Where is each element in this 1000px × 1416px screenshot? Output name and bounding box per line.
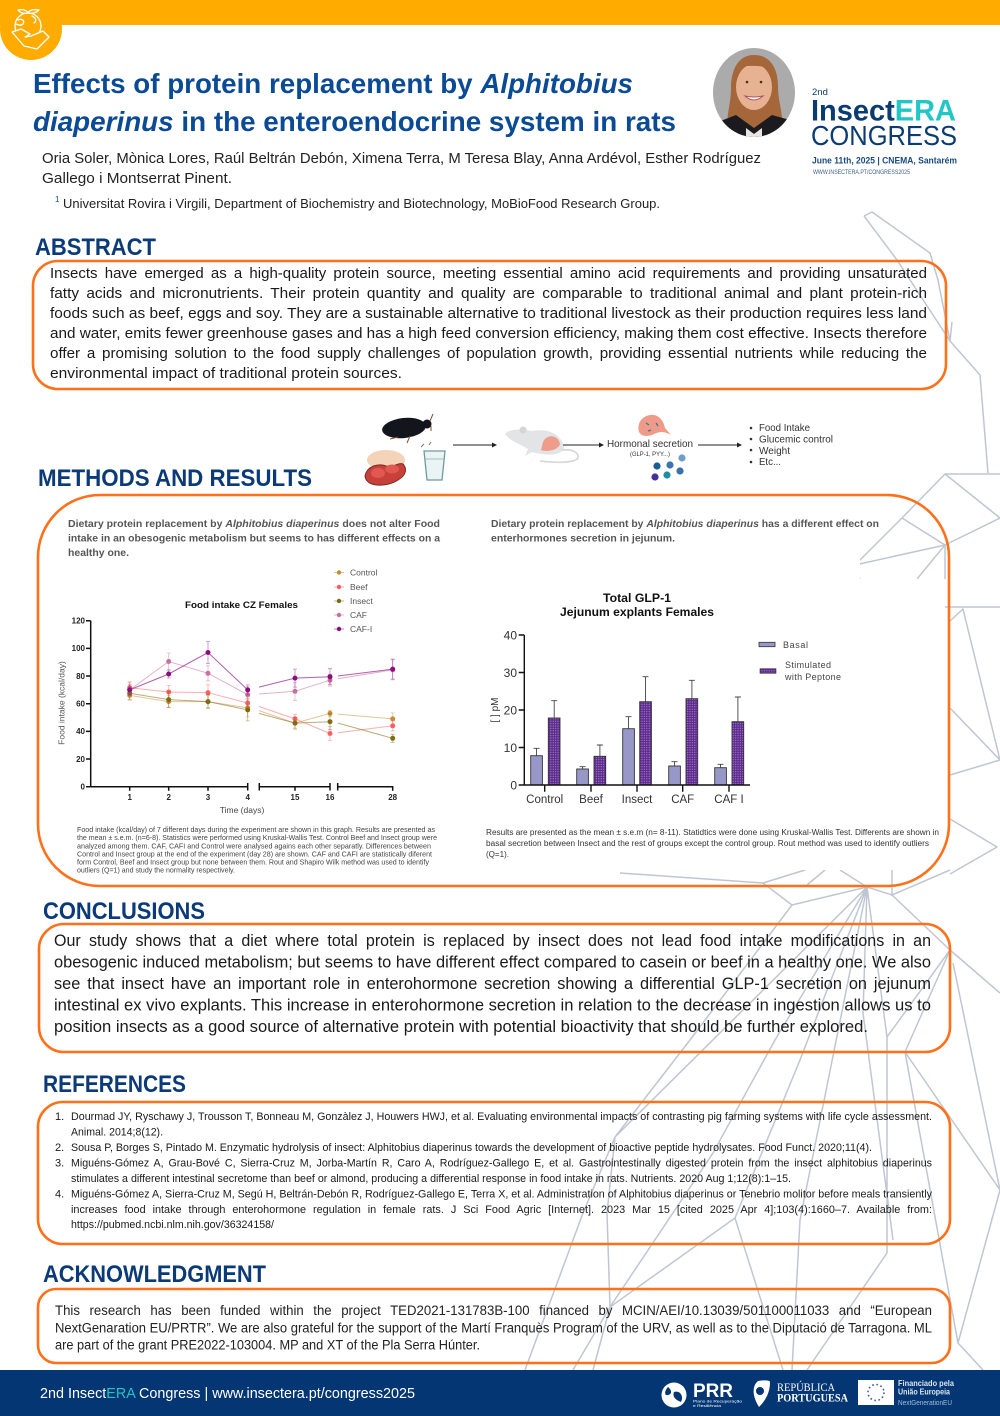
heading: conclusions: CONCLUSIONS xyxy=(43,898,205,925)
outcomes list: Glucemic control xyxy=(759,434,833,446)
reference list: https://pubmed.ncbi.nlm.nih.gov/36324158/ xyxy=(71,1219,275,1231)
icon: beetle xyxy=(381,414,433,443)
chart legend: Insect xyxy=(350,596,373,606)
reference list: Dourmad JY, Ryschawy J, Trousson T, Bonneau M, Gonzàlez J, Houwers HWJ, et al. Evaluating environmental impacts of contrasting pig farming systems with life cycle assessment. xyxy=(71,1111,932,1123)
panel: references xyxy=(38,1102,950,1244)
logo: EU funding: União Europeia xyxy=(898,1388,950,1396)
chart axes: 0 xyxy=(81,782,86,792)
reference list: increases food intake through enterohormone regulation in female rats. J Sci Food Agric [Internet]. 2023 Mar 15 [cited 2025 Apr 4];103(4):1660–7. Available from: xyxy=(71,1204,932,1216)
diagram: experimental workflow xyxy=(365,414,833,485)
right chart caption: (Q=1). xyxy=(486,850,509,859)
title xyxy=(33,68,676,137)
chart axes: 0 xyxy=(510,778,517,792)
heading: methods and results: METHODS AND RESULTS xyxy=(38,465,312,492)
chart axes: 15 xyxy=(291,793,300,802)
chart title: Jejunum explants Females xyxy=(560,605,714,619)
reference list: Animal. 2014;8(12). xyxy=(71,1126,163,1138)
logo: PRR: Plano de Recuperação xyxy=(693,1400,742,1404)
right subheading: enterhormones secretion in jejunum. xyxy=(491,532,675,544)
abstract text: and water, emits fewer greenhouse gases and has a high feed conversion efficiency, making them cost effective. Insects therefore xyxy=(50,325,927,342)
chart axes: 60 xyxy=(76,700,86,708)
chart legend: Control xyxy=(350,568,378,578)
chart axes: 30 xyxy=(504,666,517,680)
conclusions text: Our study shows that a diet where total protein is replaced by insect does not lead food intake modifications in an xyxy=(54,931,931,950)
left chart caption: outliers (Q=1) and study the normality respectively. xyxy=(77,866,235,874)
left chart caption: Food intake (kcal/day) of 7 different days during the experiment are shown in this graph. Results are presented as xyxy=(77,825,435,834)
logo: República Portuguesa: REPÚBLICA xyxy=(777,1380,835,1394)
chart axes xyxy=(490,628,750,806)
abstract text: offer a promising solution to the food supply challenges of population growth, providing essential nutrients while reducing the xyxy=(50,345,927,362)
outcomes list: Etc... xyxy=(759,456,781,468)
heading: acknowledgment: ACKNOWLEDGMENT xyxy=(43,1261,266,1288)
abstract text xyxy=(50,265,927,382)
left chart caption: analyzed among them. CAF, CAFI and Control were analysed agains each other separatly. Differences between xyxy=(77,842,431,850)
conclusions text: obesogenic induced metabolism; but seems to have different effect compared to casein or beef in a healthy one. We also xyxy=(54,952,931,972)
left subheading xyxy=(68,518,440,559)
chart axes: Time (days) xyxy=(220,805,264,815)
authors: Oria Soler, Mònica Lores, Raúl Beltrán Debón, Ximena Terra, M Teresa Blay, Anna Ardévol, Esther Rodríguez xyxy=(42,150,761,167)
left chart caption: Control and Insect group at the end of the experiment (day 28) are shown. CAF and CAFI are statistically diferent xyxy=(77,850,433,858)
abstract text: fatty acids and micronutrients. Their protein quantity and quality are comparable to traditional animal and plant protein-rich xyxy=(50,285,927,302)
reference list: Miguéns-Gómez A, Sierra-Cruz M, Segú H, Beltrán-Debón R, Rodríguez-Gallego E, Terra X, et al. Administration of Alphitobius diaperinus or Tenebrio molitor before meals transiently xyxy=(71,1188,932,1200)
acknowledgment text: This research has been funded within the project TED2021-131783B-100 financed by MCIN/AEI/10.13039/501100011033 and “European xyxy=(55,1303,932,1318)
chart title: Total GLP-1 xyxy=(603,591,671,605)
chart axes: 40 xyxy=(76,727,86,736)
arrow: to outcomes xyxy=(698,442,742,448)
right subheading: Dietary protein replacement by Alphitobius diaperinus has a different effect on xyxy=(491,518,879,530)
chart axes: 20 xyxy=(504,704,517,718)
chart title: Food intake CZ Females xyxy=(185,600,298,610)
authors: Gallego i Montserrat Pinent. xyxy=(42,170,232,187)
conclusions text: position insects as a good source of alternative protein with potential bioactivity that should be further explored. xyxy=(54,1017,868,1036)
chart axes: Beef xyxy=(579,794,604,806)
acknowledgment text: are part of the grant PRE2022-103004. MP and XT of the Pla Serra Húnter. xyxy=(55,1338,480,1352)
left chart caption: form Control, Beef and Insect group but none between them. Rout and Shapiro Wilk method was used to identify xyxy=(77,858,429,866)
chart axes: Insect xyxy=(622,794,653,806)
reference list: Miguéns-Gómez A, Grau-Bové C, Sierra-Cruz M, Jorba-Martín R, Caro A, Rodríguez-Gallego E, et al. Gastrointestinally digested protein from the insect alphitobius diaperinus xyxy=(71,1158,932,1170)
reference list: 1. xyxy=(55,1111,64,1123)
hormone dots xyxy=(651,454,686,481)
icon: water glass xyxy=(421,442,445,480)
chart axes: 4 xyxy=(245,793,250,802)
heading: references: REFERENCES xyxy=(43,1071,186,1098)
logo: PRR: PRR xyxy=(693,1381,733,1402)
logo: EU funding: NextGenerationEU xyxy=(898,1400,952,1407)
chart axes: 3 xyxy=(206,793,211,802)
chart axes: 20 xyxy=(76,755,86,764)
right subheading xyxy=(491,518,879,544)
chart axes: Control xyxy=(526,794,563,806)
chart axes: 100 xyxy=(72,644,86,653)
affiliation: 1 xyxy=(55,195,60,204)
chart legend: with Peptone xyxy=(784,672,841,682)
logo: EU funding xyxy=(858,1379,954,1407)
arrow: to rat xyxy=(453,442,497,448)
panel: conclusions xyxy=(39,924,950,1052)
arrow: to hormonal secretion xyxy=(563,442,604,448)
chart axes: 16 xyxy=(326,793,335,802)
outcomes list xyxy=(750,422,833,468)
bars: stimulated with peptone xyxy=(548,699,744,785)
chart axes: 10 xyxy=(504,741,517,755)
conclusions text: see that insect have an important role in enterohormone secretion showing a differential GLP-1 secretion on jejunum xyxy=(54,974,931,993)
chart axes xyxy=(56,616,398,815)
icon: globe in hand with sprout xyxy=(12,10,49,49)
conclusions text xyxy=(54,931,931,1036)
title: Effects of protein replacement by Alphitobius xyxy=(33,68,633,99)
chart axes: 40 xyxy=(504,628,517,642)
icon: rat xyxy=(505,426,578,462)
author photo xyxy=(712,48,796,140)
logo: República Portuguesa xyxy=(754,1380,848,1407)
reference list: Sousa P, Borges S, Pintado M. Enzymatic hydrolysis of insect: Alphitobius diaperinus towards the development of bioactive peptide hydrolysates. Food Funct. 2020;11(4). xyxy=(71,1142,872,1154)
hormonal secretion label: Hormonal secretion xyxy=(607,439,693,450)
hormonal secretion label: (GLP-1, PYY...) xyxy=(630,452,670,458)
chart legend: CAF xyxy=(350,610,367,620)
abstract text: Insects have emerged as a high-quality protein source, meeting essential amino acid requirements and providing unsaturated xyxy=(50,265,927,282)
congress logo: CONGRESS xyxy=(811,120,957,151)
congress logo: WWW.INSECTERA.PT/CONGRESS2025 xyxy=(813,170,911,176)
left subheading: healthy one. xyxy=(68,547,129,559)
reference list: 3. xyxy=(55,1158,64,1170)
outcomes list: Food Intake xyxy=(759,422,810,434)
series: insect xyxy=(127,687,395,742)
series: control xyxy=(127,690,395,728)
conclusions text: intestinal ex vivo explants. This increase in enterohormone secretion in relation to the decrease in ingestion allows us to xyxy=(54,996,931,1014)
title: diaperinus in the enteroendocrine system in rats xyxy=(33,106,676,137)
series: CAF xyxy=(127,653,395,703)
hormonal secretion label xyxy=(607,439,693,458)
left subheading: intake in an obesogenic metabolism but seems to has different effects on a xyxy=(68,532,440,544)
abstract text: foods such as beef, eggs and soy. They are a sustainable alternative to traditional livestock as their production requires less land xyxy=(50,305,927,322)
outcomes list: Weight xyxy=(759,445,790,457)
logo: PRR: e Resiliência xyxy=(693,1404,721,1408)
congress logo: InsectERA xyxy=(811,94,956,128)
left subheading: Dietary protein replacement by Alphitobius diaperinus does not alter Food xyxy=(68,518,440,530)
logo: República Portuguesa: PORTUGUESA xyxy=(777,1390,848,1404)
panel: abstract xyxy=(33,261,946,389)
chart title xyxy=(560,591,714,619)
reference list: stimulates a different intestinal secretome than beef or almond, producing a differential response in food intake in rats. Nutrients. 2020 Aug 1;12(8):1–15. xyxy=(71,1173,791,1185)
acknowledgment text xyxy=(55,1303,932,1352)
right chart caption xyxy=(486,828,939,859)
chart axes: 80 xyxy=(76,672,86,681)
chart axes: Food intake (kcal/day) xyxy=(56,661,66,745)
heading: abstract: ABSTRACT xyxy=(35,234,156,261)
acknowledgment text: NextGenaration EU/PRTR”. We are also grateful for the support of the Martí Franquès Program of the URV, as well as to the Diputació de Tarragona. ML xyxy=(55,1320,932,1336)
congress logo: June 11th, 2025 | CNEMA, Santarém xyxy=(812,156,957,166)
series: CAF-I xyxy=(127,642,395,695)
reference list: 2. xyxy=(55,1142,64,1154)
bars: basal xyxy=(531,729,726,785)
reference list xyxy=(55,1111,932,1231)
logo: PRR xyxy=(662,1381,742,1408)
chart axes: 1 xyxy=(127,793,132,802)
abstract text: environmental impact of traditional protein sources. xyxy=(50,365,402,382)
bar chart: total GLP-1 xyxy=(490,591,841,806)
chart legend: Beef xyxy=(350,582,368,592)
left chart caption xyxy=(77,825,437,874)
chart legend: Stimulated xyxy=(785,660,831,670)
line chart: food intake xyxy=(56,568,398,815)
panel: methods and results xyxy=(38,495,949,886)
congress logo: 2nd xyxy=(812,87,828,98)
reference list: 4. xyxy=(55,1188,64,1200)
footer text: 2nd InsectERA Congress | www.insectera.pt/congress2025 xyxy=(40,1385,415,1402)
chart legend xyxy=(334,568,378,634)
chart axes: [ ] pM xyxy=(490,697,501,723)
panel: acknowledgment xyxy=(38,1289,950,1363)
chart legend: Basal xyxy=(783,640,808,650)
header band xyxy=(0,0,1000,60)
chart legend xyxy=(759,640,841,682)
icon: intestine xyxy=(638,415,671,436)
chart axes: 2 xyxy=(166,793,171,802)
chart axes: 28 xyxy=(388,793,398,802)
series: beef xyxy=(127,682,395,740)
error bars xyxy=(534,677,741,769)
affiliation: Universitat Rovira i Virgili, Department of Biochemistry and Biotechnology, MoBioFood Research Group. xyxy=(63,196,660,211)
icon: steak xyxy=(365,450,405,485)
chart axes: CAF I xyxy=(714,794,744,806)
left chart caption: the mean ± s.e.m. (n=6-8). Statistics were performed using Kruskal-Wallis Test. Control Beef and Insect group were xyxy=(77,833,437,842)
chart axes: 120 xyxy=(72,616,86,626)
right chart caption: Results are presented as the mean ± s.e.m (n= 8-11). Statidtics were done using Kruskal-Wallis Test. Differents are shown in xyxy=(486,828,939,837)
authors xyxy=(42,150,761,187)
chart legend: CAF-I xyxy=(350,624,372,634)
footer band xyxy=(0,1370,1000,1416)
chart axes: CAF xyxy=(671,794,694,806)
logo: EU funding: Financiado pela xyxy=(898,1379,954,1388)
congress logo xyxy=(811,87,957,176)
right chart caption: basal secretion between Insect and the rest of groups except the control group. Rout method was used to identify outliers xyxy=(486,839,929,848)
